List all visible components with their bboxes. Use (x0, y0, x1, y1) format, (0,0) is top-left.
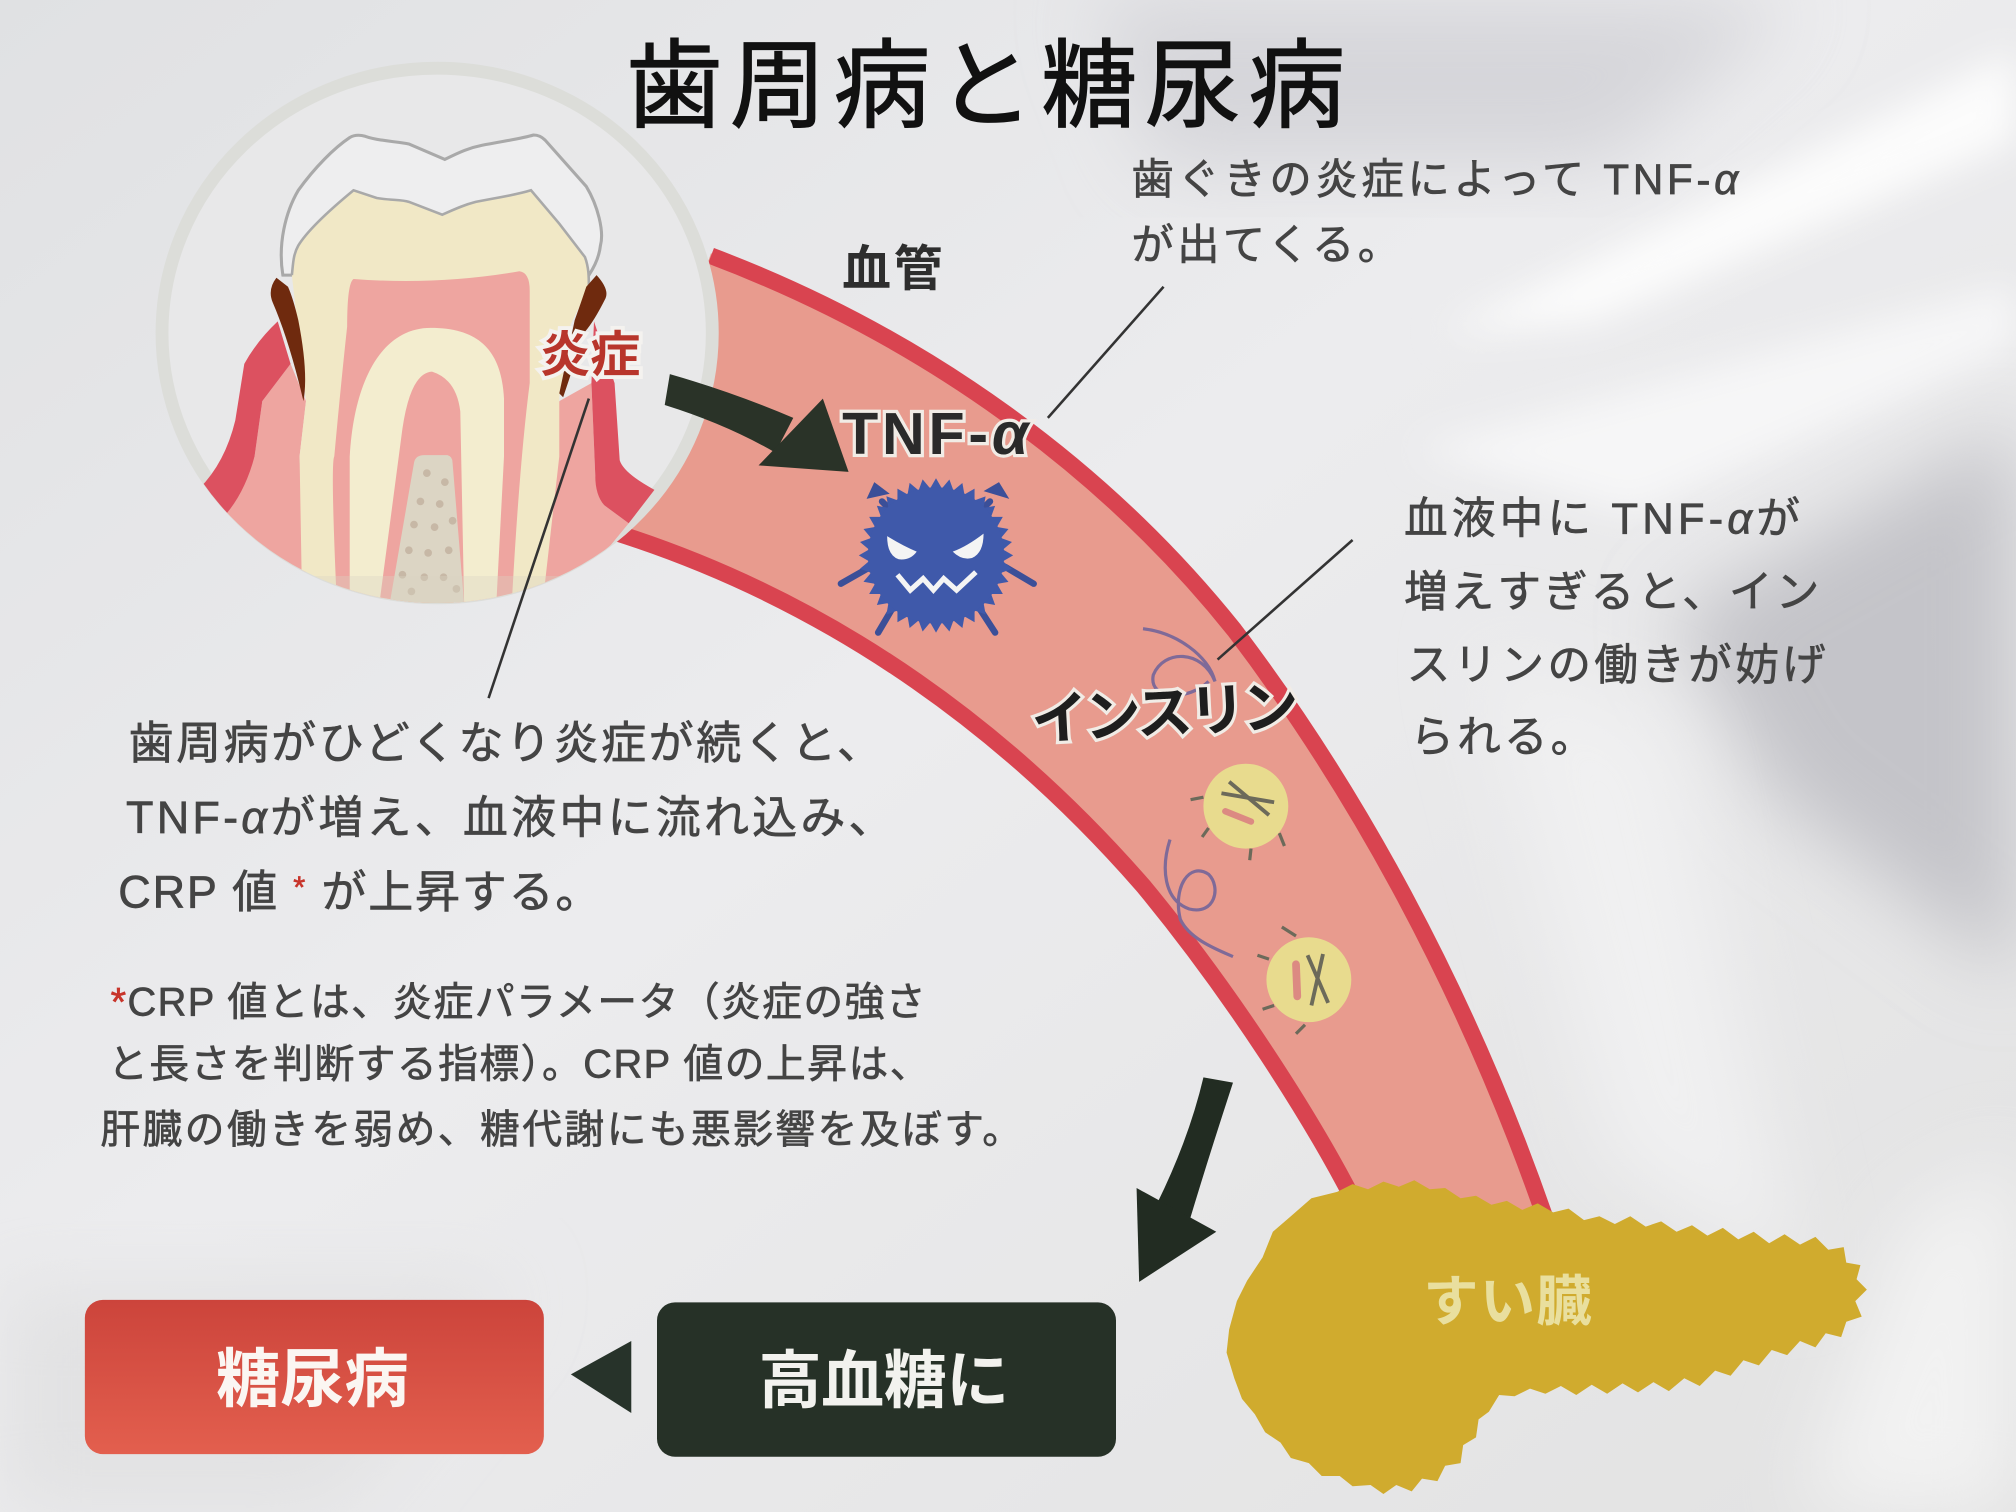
magnified tooth circle (162, 68, 712, 617)
bone (390, 455, 464, 604)
icon: TNF-alpha virus (841, 453, 1038, 645)
icon: beta cell upper (1191, 764, 1288, 860)
text: left explanation: * (293, 869, 305, 904)
text: left explanation: 歯周病がひどくなり炎症が続くと、 (129, 718, 882, 769)
text: TNF emerges from gum inflammation (1131, 156, 1740, 269)
inner dentin (350, 328, 504, 604)
pulp (333, 271, 530, 604)
gums right (514, 383, 629, 604)
tartar right (559, 275, 606, 397)
label: insulin: インスリン (1030, 675, 1300, 752)
text: too much TNF blocks insulin: 増えすぎると、イン (1404, 568, 1819, 617)
text: left explanation: が上昇する。 (307, 867, 600, 918)
leader line: top callout (1048, 287, 1164, 418)
label: pancreas: すい臓 (1423, 1270, 1592, 1332)
text: too much TNF blocks insulin (1404, 495, 1826, 762)
dentin (292, 190, 589, 604)
text: too much TNF blocks insulin: スリンの働きが妨げ (1407, 641, 1826, 690)
arrow: high blood sugar to diabetes (571, 1341, 631, 1413)
gums left (226, 364, 306, 572)
circle lens (162, 68, 712, 598)
leader line: inflammation (489, 399, 589, 698)
text: CRP footnote: と長さを判断する指標）。CRP 値の上昇は、 (108, 1042, 930, 1086)
title: 歯周病と糖尿病 (626, 34, 1345, 141)
text: too much TNF blocks insulin: 血液中に TNF-αが (1404, 495, 1800, 544)
tartar left (271, 278, 305, 401)
blood vessel (615, 253, 1552, 1215)
icon: beta cell lower (1257, 927, 1351, 1034)
text: CRP footnote: 肝臓の働きを弱め、糖代謝にも悪影響を及ぼす。 (100, 1108, 1022, 1152)
pancreas (1227, 1180, 1867, 1494)
text: TNF emerges from gum inflammation: 歯ぐきの炎症によって TNF-α (1131, 156, 1740, 203)
label: blood vessel: 血管 (842, 242, 942, 296)
box: high blood sugar: 高血糖に (759, 1347, 1009, 1417)
text: left explanation: TNF-αが増え、血液中に流れ込み、 (126, 792, 894, 843)
label: TNF-alpha: TNF-α (842, 400, 1031, 467)
text: left explanation (118, 718, 894, 918)
label: inflammation: 炎症 (540, 329, 640, 383)
text: too much TNF blocks insulin: られる。 (1410, 713, 1594, 762)
text: CRP footnote: *CRP 値とは、炎症パラメータ（炎症の強さ (111, 981, 926, 1025)
arrow: pancreas to high blood sugar (1137, 1077, 1233, 1282)
enamel (281, 135, 602, 275)
text: left explanation: CRP 値 (118, 867, 277, 918)
arrow: tooth to TNF (665, 374, 849, 472)
box: diabetes (85, 1300, 544, 1454)
icon: insulin strand upper (1143, 629, 1215, 695)
box: diabetes: 糖尿病 (216, 1343, 409, 1415)
root canal (379, 372, 464, 604)
icon: insulin strand lower (1165, 840, 1233, 957)
text: TNF emerges from gum inflammation: が出てくる。 (1131, 222, 1400, 269)
box: high blood sugar (657, 1302, 1116, 1457)
leader line: right callout (1218, 540, 1353, 660)
text: CRP footnote (100, 981, 1022, 1152)
